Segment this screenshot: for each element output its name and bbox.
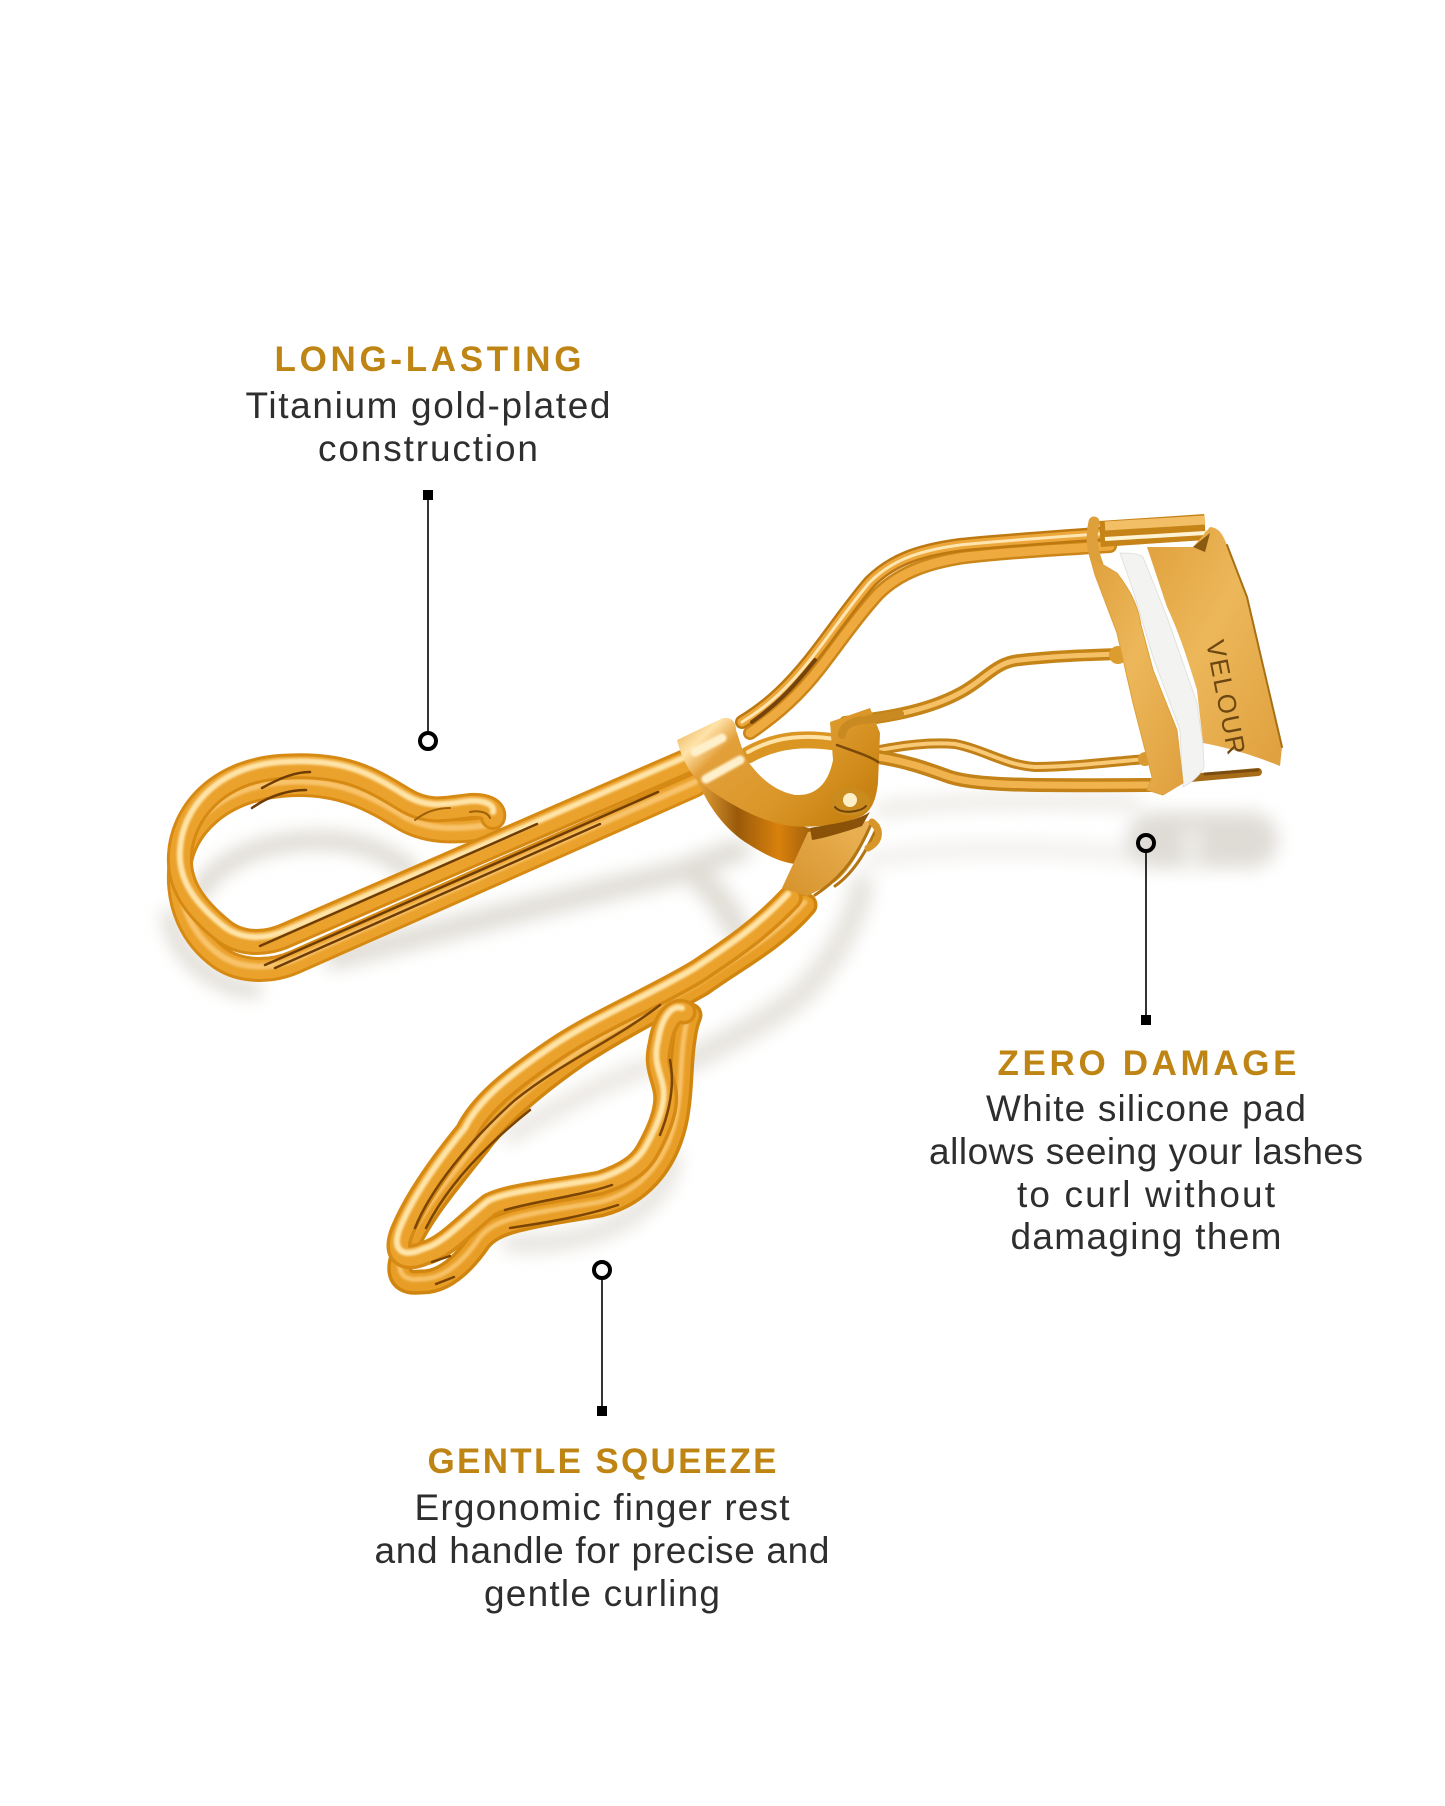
- back plate with brand: [1147, 527, 1282, 766]
- cast shadows of the curler: [170, 801, 1250, 1243]
- lower head wires: [878, 743, 1258, 785]
- dark creases on upper handle: [252, 772, 658, 968]
- white silicone pad: [1120, 553, 1204, 787]
- leader line: zero damage: [1138, 835, 1154, 1025]
- upper arm to head: [742, 533, 1110, 733]
- callout: long-lasting: [246, 340, 610, 749]
- heading: zero damage: ZERO DAMAGE: [998, 1044, 1296, 1083]
- text block: gentle squeeze description: gentle curling: [484, 1573, 720, 1614]
- lower comb strip: [1205, 770, 1258, 774]
- hinge plate: [677, 708, 880, 827]
- dark underside: [695, 775, 815, 864]
- upper handle loop: [179, 755, 695, 969]
- text block: zero damage description: to curl without: [1017, 1174, 1276, 1215]
- hinge plate and collar: [677, 708, 880, 896]
- dark creases on lower handle: [415, 1005, 672, 1284]
- text block: zero damage description: damaging them: [1010, 1216, 1282, 1257]
- curler: gold eyelash curler illustration: [179, 520, 1282, 1284]
- text block: long-lasting description: Titanium gold-plated: [246, 385, 610, 426]
- heading: gentle squeeze: GENTLE SQUEEZE: [428, 1442, 776, 1481]
- pivot wire behind the hinge: [748, 737, 835, 755]
- text block: zero damage description: allows seeing your lashes: [929, 1131, 1363, 1172]
- edge loop behind hinge: [868, 822, 878, 848]
- callout: zero damage: [929, 835, 1363, 1257]
- engraved brand: VELOUR: VELOUR: [1200, 637, 1252, 757]
- heading: long-lasting: LONG-LASTING: [274, 340, 582, 379]
- collar highlight: [695, 738, 740, 779]
- centre spring wire: [845, 646, 1127, 722]
- text block: gentle squeeze description: [374, 1487, 830, 1614]
- text block: gentle squeeze description: Ergonomic finger rest: [414, 1487, 790, 1528]
- front plate: [1090, 557, 1183, 795]
- leader line: gentle squeeze: [594, 1262, 610, 1416]
- lower handle with finger rest: [397, 894, 805, 1284]
- text block: gentle squeeze description: and handle for precise and: [374, 1530, 830, 1571]
- leader line: long-lasting: [420, 490, 436, 749]
- hinge rivet: [830, 788, 870, 816]
- callout: gentle squeeze: [374, 1262, 830, 1614]
- text block: long-lasting description: [246, 385, 610, 469]
- top rod and ring: [1092, 520, 1205, 565]
- text block: zero damage description: White silicone pad: [986, 1088, 1306, 1129]
- lower arm plate: [782, 820, 873, 896]
- text block: zero damage description: [929, 1088, 1363, 1257]
- text block: long-lasting description: construction: [318, 428, 538, 469]
